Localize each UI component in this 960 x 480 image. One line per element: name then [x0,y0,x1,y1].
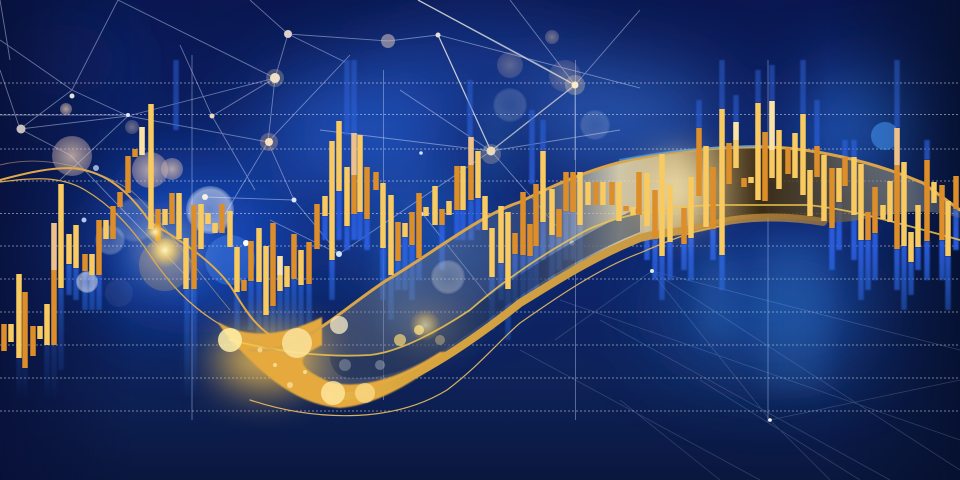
faint blue glow columns [380,100,825,390]
bokeh circles [52,30,899,307]
background blue glows [0,20,930,365]
glow of ribbon [145,158,710,390]
vertical grid lines [192,55,768,422]
orange candles [4,128,956,368]
upper-left swoosh three [0,161,230,310]
pale tops of candles [54,101,897,275]
wide top edge [250,147,960,350]
yellow candles [11,101,948,358]
bright bokeh and sparkles on ribbon [145,222,445,405]
network nodes [16,30,772,422]
network lines, upper area [0,0,640,300]
blue sheen on top edge [620,146,767,160]
upper-left swoosh one [0,168,270,335]
dark gap inside ribbon [330,207,640,378]
thick lower-left gold mass [218,317,453,408]
thin yellow mid curve [230,205,960,356]
candle reflections [19,60,956,430]
thin under curve [250,226,723,416]
gold ribbon body [250,147,960,397]
network lines, lower right [520,270,960,480]
dotted horizontal grid [0,83,960,411]
thick lower band [330,218,823,396]
gold wave curves [0,146,960,416]
upper-left swoosh two [0,179,300,358]
